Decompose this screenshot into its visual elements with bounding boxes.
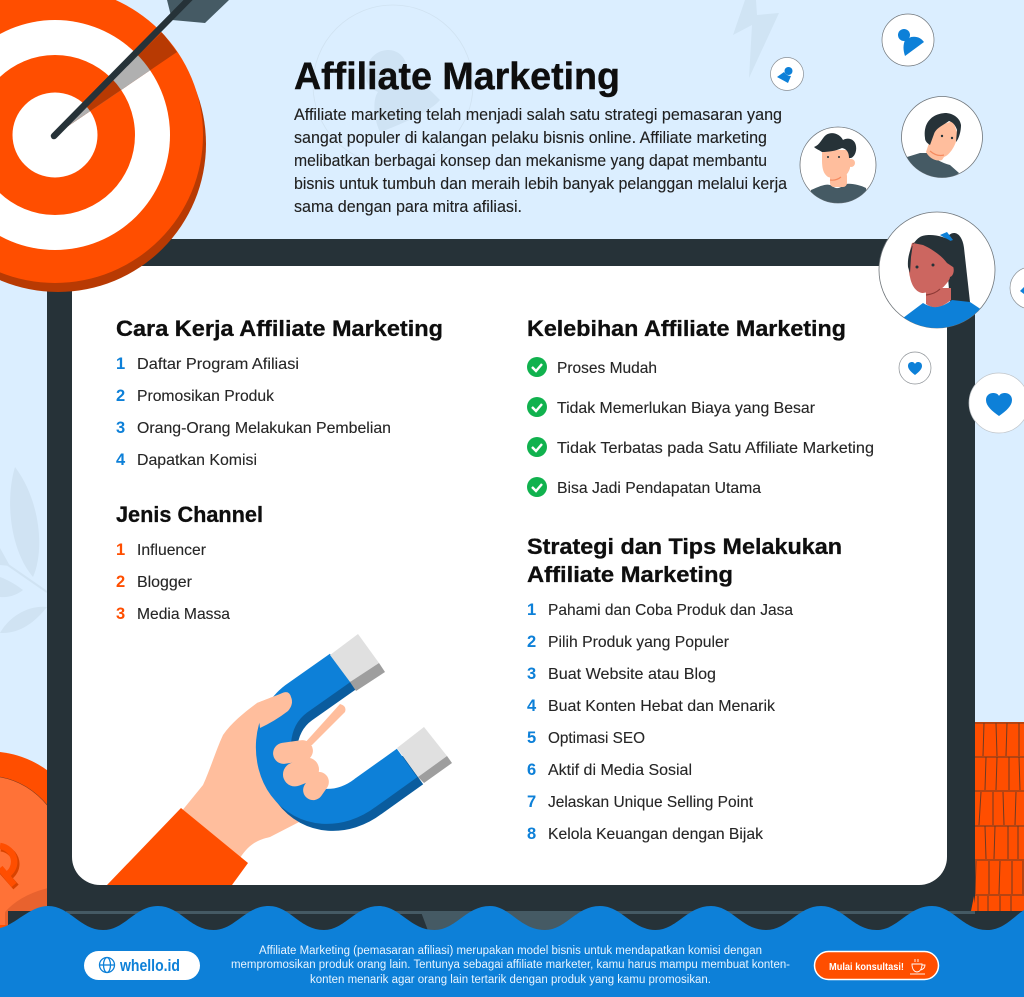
heading: strategies and tips: Strategi dan Tips Melakukan [527,534,842,559]
list: strategies and tips: 4 [527,697,537,715]
background decoration: faint user icon [313,5,473,165]
background decoration: leaves [0,467,47,633]
footer description: Affiliate Marketing (pemasaran afiliasi) merupakan model bisnis untuk mendapatkan komisi dengan [259,945,762,957]
list: channel types [116,541,230,623]
list: advantages with check icons [527,357,874,497]
avatar: woman with ponytail [879,212,995,335]
footer description: konten menarik agar orang lain tertarik dengan produk yang kamu promosikan. [310,974,711,986]
intro paragraph: Affiliate marketing telah menjadi salah satu strategi pemasaran yang [294,106,782,124]
list: channel types: 2 [116,573,125,591]
list: strategies and tips [527,601,793,843]
illustration: hand holding magnet [107,634,452,885]
call to action button [814,952,938,980]
list: advantages with check icons: Bisa Jadi Pendapatan Utama [557,480,761,497]
list: how it works steps: Daftar Program Afiliasi [137,356,299,373]
intro paragraph: sangat populer di kalangan pelaku bisnis online. Affiliate marketing [294,129,767,147]
list: channel types: 1 [116,541,125,559]
list: advantages with check icons: Tidak Terbatas pada Satu Affiliate Marketing [557,440,874,457]
list: channel types: Influencer [137,542,207,559]
heading: channel types: Jenis Channel [116,502,263,527]
call to action button: Mulai konsultasi! [829,961,904,973]
icon: large user bubble [882,14,934,66]
list: strategies and tips: Aktif di Media Sosial [548,762,692,779]
list: strategies and tips: 3 [527,665,536,683]
heading: strategies and tips [527,534,842,587]
list: strategies and tips: Pahami dan Coba Produk dan Jasa [548,602,793,619]
list: strategies and tips: 2 [527,633,536,651]
icon: user bubble at right edge [1010,267,1024,309]
list: how it works steps: 3 [116,419,125,437]
footer logo pill: whello.id [119,956,180,975]
intro paragraph [294,106,788,216]
target with dart [0,0,229,292]
heading: how it works: Cara Kerja Affiliate Marketing [116,316,443,341]
list: strategies and tips: 5 [527,729,536,747]
intro paragraph: sama dengan para mitra afiliasi. [294,198,522,216]
icon: large heart bubble [969,373,1024,433]
dark board frame [8,239,1024,936]
list: how it works steps [116,355,391,469]
list: strategies and tips: Kelola Keuangan dengan Bijak [548,826,764,843]
list: how it works steps: Promosikan Produk [137,388,275,405]
footer description [231,945,790,986]
list: strategies and tips: Jelaskan Unique Selling Point [548,794,754,811]
list: channel types: Media Massa [137,606,230,623]
footer wave band [0,906,1024,997]
intro paragraph: bisnis untuk tumbuh dan meraih lebih banyak pelanggan melalui kerja [294,175,788,193]
list: strategies and tips: Pilih Produk yang Populer [548,634,730,651]
icon: small heart bubble [899,352,931,384]
list: strategies and tips: 6 [527,761,536,779]
brick wall at right [974,722,1024,912]
list: strategies and tips: Buat Konten Hebat dan Menarik [548,698,776,715]
heading: strategies and tips: Affiliate Marketing [527,562,733,587]
list: channel types: Blogger [137,574,193,591]
list: strategies and tips: Buat Website atau Blog [548,666,716,683]
avatar: man with dark shirt [800,127,876,204]
footer description: mempromosikan produk orang lain. Tentunya sebagai affiliate marketer, kamu harus mampu membuat konten- [231,959,790,971]
list: how it works steps: 1 [116,355,125,373]
list: how it works steps: 2 [116,387,125,405]
background decoration: lightning bolt [733,0,779,78]
list: strategies and tips: Optimasi SEO [548,730,645,747]
icon: small user bubble [770,58,804,90]
list: advantages with check icons: Tidak Memerlukan Biaya yang Besar [557,400,816,417]
list: how it works steps: Dapatkan Komisi [137,452,257,469]
list: strategies and tips: 8 [527,825,536,843]
footer logo pill [84,951,200,980]
heading: advantages: Kelebihan Affiliate Marketing [527,316,846,341]
coin at lower left [0,752,86,944]
list: how it works steps: Orang-Orang Melakukan Pembelian [137,420,391,437]
list: channel types: 3 [116,605,125,623]
white content panel [72,266,947,885]
intro paragraph: melibatkan berbagai konsep dan mekanisme yang dapat membantu [294,152,767,170]
avatar: man tilted head [902,96,982,182]
list: strategies and tips: 7 [527,793,536,811]
list: strategies and tips: 1 [527,601,536,619]
title: Affiliate Marketing [294,56,620,98]
list: advantages with check icons: Proses Mudah [557,360,657,377]
list: how it works steps: 4 [116,451,126,469]
